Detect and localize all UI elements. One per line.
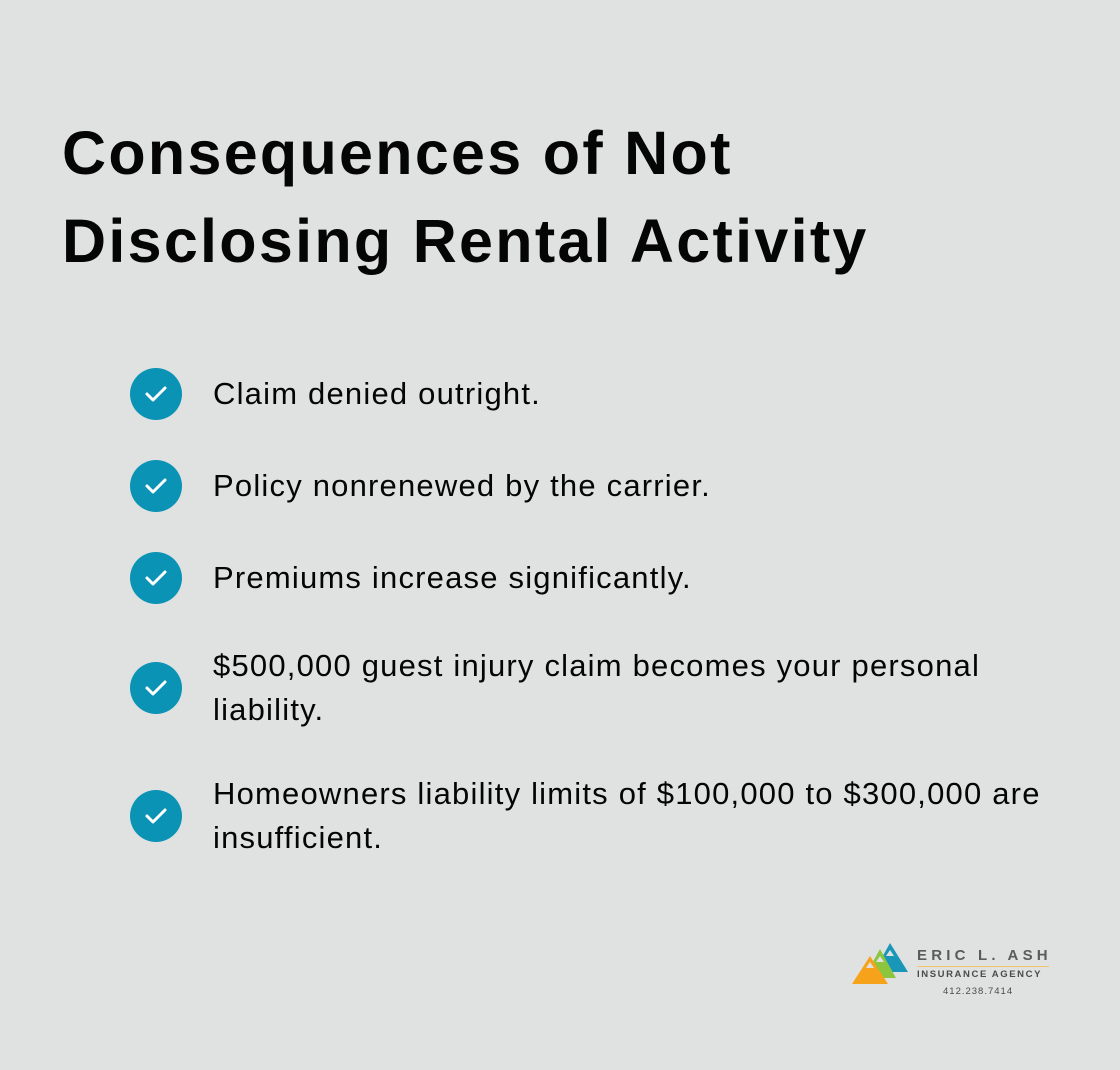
icon: check bbox=[130, 368, 182, 420]
icon: check bbox=[130, 460, 182, 512]
logo bbox=[852, 943, 1052, 997]
icon: check bbox=[130, 662, 182, 714]
item 3: Premiums increase significantly. bbox=[213, 560, 692, 595]
item 5: Homeowners liability limits of $100,000 to $300,000 are insufficient. bbox=[213, 776, 1041, 855]
logo: INSURANCE AGENCY bbox=[917, 969, 1042, 980]
title: Disclosing Rental Activity bbox=[62, 207, 869, 275]
icon: check bbox=[130, 790, 182, 842]
icon: check bbox=[130, 552, 182, 604]
logo text: ERIC L. ASH bbox=[917, 947, 1052, 964]
item 1 bbox=[130, 368, 541, 420]
title: Consequences of Not bbox=[62, 119, 733, 187]
item 4: $500,000 guest injury claim becomes your personal liability. bbox=[213, 648, 980, 727]
item 1: Claim denied outright. bbox=[213, 376, 541, 411]
title bbox=[62, 119, 869, 275]
item 3 bbox=[130, 552, 692, 604]
item 2 bbox=[130, 460, 711, 512]
item 2: Policy nonrenewed by the carrier. bbox=[213, 468, 711, 503]
icon: logo triangles bbox=[852, 943, 908, 984]
logo: 412.238.7414 bbox=[943, 986, 1013, 997]
